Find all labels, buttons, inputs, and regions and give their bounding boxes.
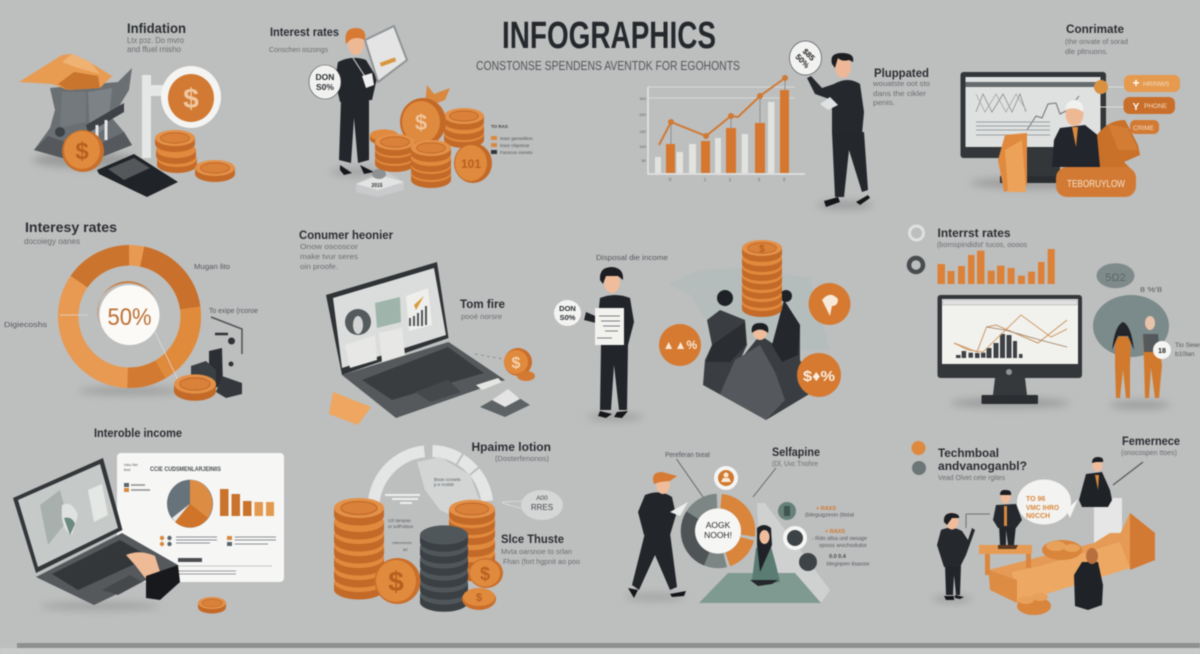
conrimate heading — [1065, 24, 1128, 56]
speech bubble: 8 %'8 — [1140, 285, 1162, 294]
icon: key and blocks — [191, 317, 242, 398]
badge: don percent: S0% — [316, 82, 334, 92]
icon: laptop — [326, 262, 505, 418]
title: INFOGRAPHICS — [502, 15, 716, 57]
bar chart: 1 — [729, 177, 732, 182]
person left — [932, 512, 990, 602]
tom fire text — [460, 299, 505, 321]
consumer heading: make tvur seres — [300, 252, 358, 261]
speech bubble — [1096, 263, 1162, 294]
icon: cash box: 2015 — [371, 183, 383, 189]
selfapine heading: (Dl, Uvc Tnohre — [772, 461, 818, 468]
interest rates heading — [269, 27, 339, 54]
ring chart: NOOH! — [704, 530, 732, 540]
person presenting — [807, 53, 873, 209]
orange bed and chart block — [988, 498, 1155, 603]
speech cloud — [1017, 480, 1078, 524]
legend — [491, 124, 533, 155]
connector pills: CRIME — [1133, 125, 1155, 132]
report card: CCIE CUDSMENLARJEINIIS — [150, 466, 222, 473]
donut labels — [4, 264, 258, 329]
seated woman — [750, 525, 780, 586]
badge: don percent — [309, 65, 341, 99]
badge: don: DON — [559, 304, 576, 313]
panel: technical advantage — [912, 436, 1180, 615]
bar chart: 200 — [639, 112, 647, 117]
legend: Fanscos cionsto — [500, 150, 533, 155]
person on table — [993, 490, 1022, 549]
inflation heading: and ffuel rnisho — [127, 45, 182, 54]
coin pile: 101 — [461, 157, 481, 171]
icon: desktop monitor — [960, 72, 1110, 189]
cloud callout — [502, 490, 563, 520]
slce thuste text — [501, 534, 580, 566]
icon: upright coin: $ — [75, 138, 89, 165]
map and notes: US taropae — [388, 518, 411, 523]
connector pills: HRINWS — [1143, 81, 1170, 88]
badge: rotated percent: $85 — [801, 47, 817, 63]
icon: dollar sign: $ — [183, 83, 199, 114]
inflation heading: Ltx pɔz. Do mvro — [127, 36, 185, 45]
labels and leaders — [665, 452, 776, 497]
pie chart — [167, 480, 213, 528]
panel: interest donut — [4, 220, 258, 401]
coin piles — [1017, 540, 1082, 615]
interesy rates heading — [24, 220, 117, 246]
icon: dollar coins: $ — [476, 592, 482, 604]
speech cloud: N0CCH — [1026, 513, 1050, 520]
bar chart: 0 — [669, 177, 672, 182]
speech cloud: TO 96 — [1026, 496, 1045, 503]
legend: TO RAS — [491, 124, 508, 129]
person with clipboard — [330, 26, 407, 176]
panel: consumer laptop — [299, 230, 535, 425]
interest rates heading: Interest rates — [270, 27, 339, 39]
consumer heading: oin proofe. — [300, 262, 338, 271]
consumer heading — [299, 230, 394, 271]
icon: dollar coin: $ — [512, 355, 521, 372]
icon: laptop with map — [13, 458, 178, 610]
icon: phone — [97, 154, 178, 197]
list items: blegnpen tisaose — [826, 562, 870, 568]
report bars — [220, 489, 274, 516]
globe with two women: 18 — [1158, 348, 1166, 355]
person with paper — [584, 267, 643, 421]
pluppated text: dans the cikler — [873, 89, 927, 98]
speech bubble: 5Ω2 — [1105, 272, 1126, 284]
consumer heading: Conumer heonier — [299, 230, 394, 242]
hpaime heading: Hpaime lotion — [472, 440, 551, 454]
bar chart: 100 — [639, 144, 647, 149]
coin stacks — [334, 498, 495, 612]
list items: + RAXS — [825, 529, 845, 535]
interest heading: (bornspindidst' tucos, oooos — [937, 240, 1027, 249]
report card — [117, 453, 284, 582]
globe with two women — [1093, 295, 1171, 409]
slce thuste text: Mvta oarsnoe to srlan — [501, 547, 572, 556]
badge: don percent: DON — [316, 72, 334, 82]
donut chart — [60, 255, 191, 395]
panel: selfapine donut — [625, 447, 870, 603]
coin tower — [742, 240, 782, 317]
paper document — [595, 308, 624, 345]
label pill: TEBORUYLOW — [1067, 178, 1125, 190]
hpaime heading — [472, 440, 551, 463]
panel: conrimate monitor — [960, 24, 1180, 197]
pluppated text: penis. — [873, 98, 895, 107]
speech cloud: VMC IHRO — [1026, 505, 1060, 512]
techmboal heading: Vead Olvet cete rgites — [938, 475, 1005, 482]
techmboal heading: andvanoganbl? — [938, 459, 1027, 473]
coin tower: $ — [759, 244, 765, 255]
slce thuste text: Fhan (fort hgpnit ao poo — [503, 557, 580, 566]
cloud callout: A00 — [536, 495, 548, 502]
bar chart: 50 — [642, 158, 647, 163]
disposal income label: Disposal die income — [596, 253, 668, 262]
person seated top — [1079, 457, 1143, 507]
selfapine heading — [772, 447, 820, 468]
hpaime heading: (Dosterfenonos) — [495, 454, 549, 463]
femernece heading — [1121, 436, 1180, 457]
inflation heading — [127, 20, 186, 54]
ring chart — [688, 501, 748, 561]
map and notes: or sofPubtus — [388, 524, 414, 529]
map and notes: Bsoe ccvsets — [434, 477, 461, 482]
ring chart — [374, 451, 488, 565]
coin pile — [370, 85, 492, 188]
inflation heading: Infidation — [127, 20, 186, 36]
slce thuste text: Slce Thuste — [501, 534, 564, 546]
donut labels: Digiecoshs — [4, 322, 48, 329]
interoble heading: Interoble income — [94, 428, 182, 440]
map and notes: p e rcotstr — [434, 482, 455, 487]
subtitle: CONSTONSE SPENDENS AVENTDK FOR EGOHONTS — [476, 59, 740, 73]
table — [979, 545, 1032, 575]
report card: llod — [124, 467, 130, 472]
bar chart: 1 — [704, 177, 707, 182]
list items: (blegugzeon (tlstal — [805, 512, 854, 518]
map and notes: rotennenzs — [392, 540, 412, 545]
femernece heading: Femernece — [1122, 436, 1180, 448]
list items: sposs wvchsdutor — [819, 543, 867, 549]
donut labels: To exipe (rcoroe — [209, 308, 258, 315]
bar chart: 2 — [758, 177, 761, 182]
list items: 0.0 0.4 — [829, 554, 847, 560]
side label: b10lan — [1175, 351, 1195, 358]
orange cloth figures — [998, 120, 1140, 192]
labels and leaders: Pereferan txeat — [665, 452, 710, 459]
icon: dollar sign — [142, 66, 221, 158]
panel: inflation — [19, 20, 235, 197]
legend: Insor cfapstcar — [500, 143, 530, 148]
icon: dollar coins: $ — [388, 566, 404, 597]
icon: flat coin — [174, 374, 216, 401]
icon: orange badges: ▲▲% — [663, 338, 698, 352]
rug — [699, 573, 821, 603]
hand and sleeve — [126, 552, 180, 600]
pluppated text: wouatste oot sto — [872, 79, 930, 88]
icon: dollar coins: $ — [480, 564, 490, 584]
icon: cash box — [356, 169, 404, 197]
techmboal heading — [938, 446, 1027, 482]
side label — [1175, 342, 1200, 358]
selfapine heading: Selfapine — [772, 447, 820, 459]
bar chart: 300 — [639, 96, 647, 101]
connector pills: PHONE — [1144, 103, 1168, 110]
bar chart: 3 — [783, 177, 786, 182]
list items — [778, 502, 870, 571]
connector pills: + — [1132, 76, 1140, 90]
panel: interoble income — [13, 428, 284, 614]
panel: interest rates — [269, 26, 533, 197]
report card: Ioku ller — [124, 462, 139, 467]
map and notes: 80 — [403, 547, 408, 552]
donut chart: 50% — [108, 304, 152, 331]
icon: profile badge — [714, 466, 738, 490]
panel: growth bar chart — [639, 41, 930, 209]
badge: don: S0% — [560, 313, 576, 322]
legend dots — [912, 441, 926, 475]
interesy rates heading: docoiegy oanes — [24, 237, 80, 246]
tom fire text: pooè norsre — [461, 312, 502, 321]
donut labels: Mugan lito — [194, 264, 230, 271]
icon: orange badges — [659, 283, 850, 397]
icon: envelope — [329, 392, 371, 425]
icon: coin stack — [155, 130, 235, 182]
world map — [669, 268, 830, 350]
status rings — [909, 226, 924, 272]
conrimate heading: dle pltnuons. — [1065, 47, 1108, 56]
icon: dollar coin — [475, 348, 535, 381]
orange bars — [938, 249, 1055, 284]
light backdrop — [757, 503, 830, 603]
walking person — [625, 472, 688, 600]
consumer heading: Onow oscoscor — [300, 242, 359, 251]
badge: don — [554, 300, 581, 326]
person kneeling — [1074, 548, 1103, 610]
connector pills: Y — [1133, 102, 1140, 113]
label pill — [1056, 167, 1136, 197]
pluppated text — [872, 68, 930, 107]
panel: disposal income map — [554, 240, 850, 421]
tom fire text: Tom fire — [460, 299, 505, 311]
bar chart — [639, 75, 805, 182]
ring chart: AOGK — [706, 520, 731, 530]
interest heading: Interrst rates — [938, 228, 1010, 240]
connector pills — [1094, 75, 1180, 134]
conrimate heading: (the onvate of sorad — [1065, 37, 1128, 46]
panel: ring and coin stacks — [334, 440, 580, 612]
femernece heading: (onocospen ttoes) — [1121, 450, 1177, 457]
badge: rotated percent — [790, 41, 822, 75]
conrimate heading: Conrimate — [1066, 24, 1124, 36]
line chart monitor — [938, 295, 1082, 408]
icon: dollar coins — [374, 558, 503, 610]
techmboal heading: Techmboal — [938, 446, 999, 460]
icon: dark mountains — [703, 290, 816, 420]
pluppated text: Pluppated — [874, 68, 929, 80]
icon: upright coin — [62, 130, 104, 172]
panel: interest monitor — [909, 226, 1200, 409]
map and notes — [385, 457, 486, 552]
coin pile: $ — [415, 110, 427, 135]
icon: coin machine — [19, 54, 137, 168]
list items: + RAXS — [816, 506, 836, 512]
badge: rotated percent: 50% — [793, 52, 811, 70]
legend: Inser ganselition — [500, 136, 533, 141]
interest heading — [937, 228, 1027, 249]
list items: - Rido atlsa und owsage — [812, 536, 867, 542]
icon: orange badges: $♦% — [803, 368, 835, 385]
cloud callout: RRES — [531, 503, 553, 512]
interesy rates heading: Interesy rates — [25, 220, 117, 235]
icon: device — [480, 389, 530, 417]
man at screen — [1052, 100, 1101, 167]
icon: small coin — [198, 597, 226, 614]
bar chart: 150 — [639, 129, 647, 134]
interest rates heading: Conschen oszongs — [269, 45, 328, 54]
